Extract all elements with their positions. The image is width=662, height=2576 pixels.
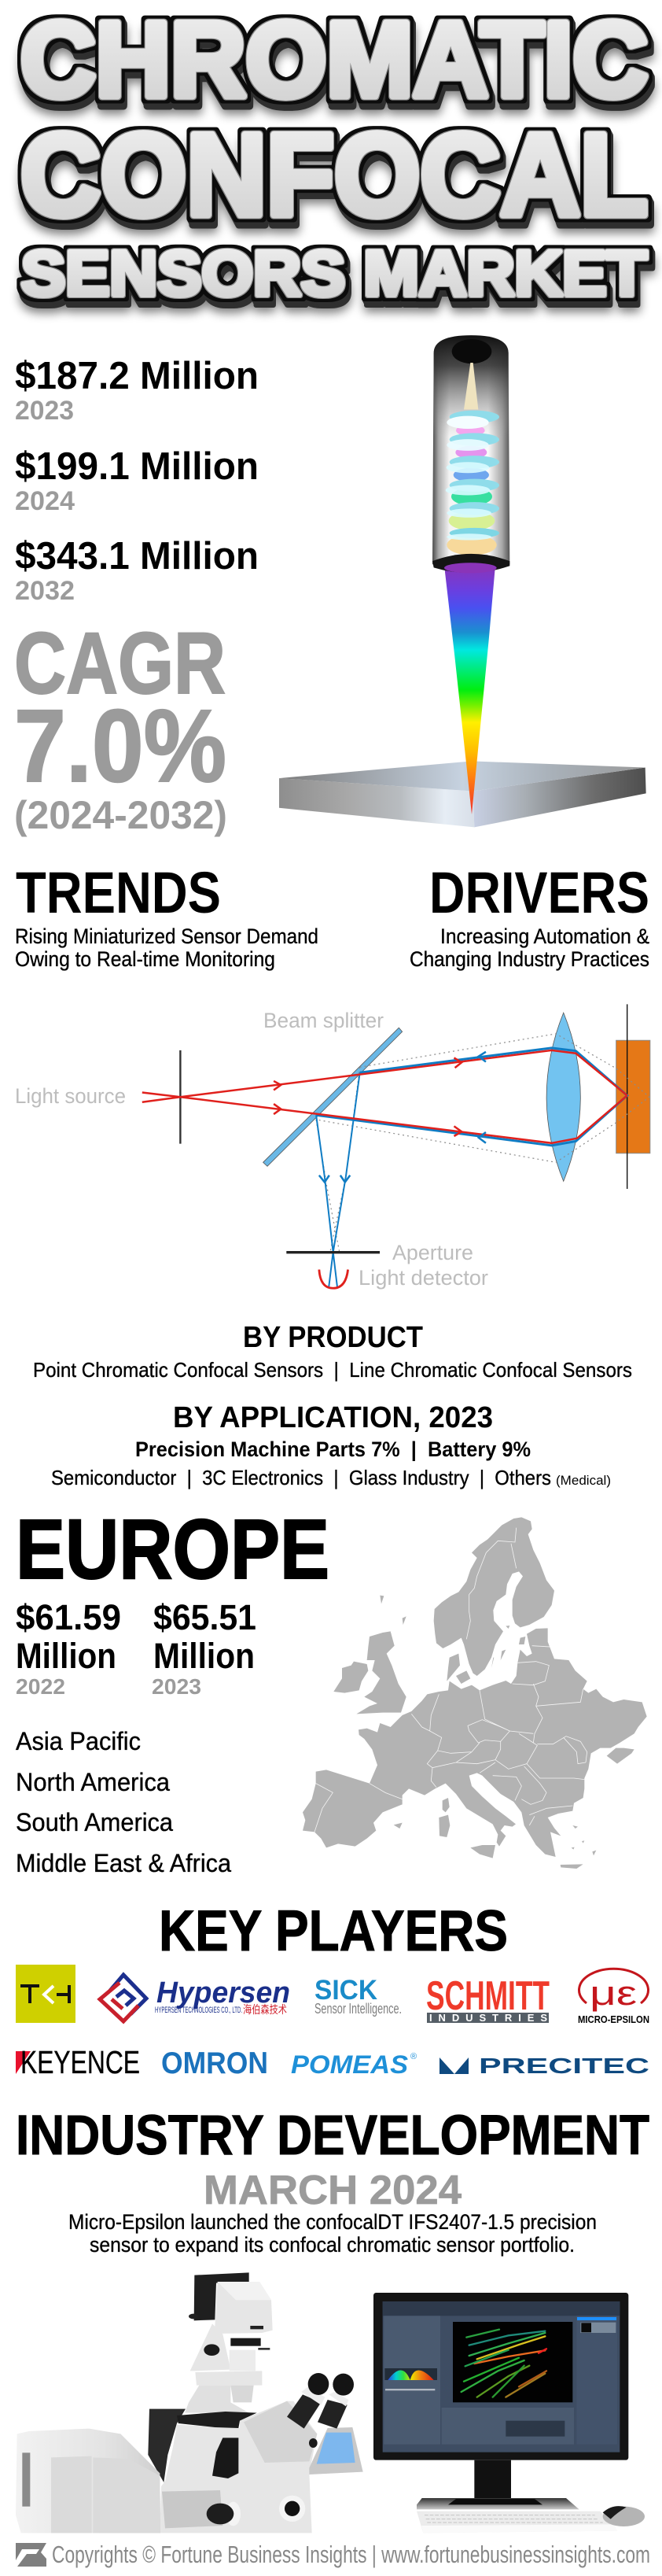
sensor tube [432,335,509,573]
monitor stand [474,2460,511,2500]
logo: Omron: OMRON [161,2046,268,2080]
value 2022: $61.59 [16,1597,121,1637]
label: beam splitter: Beam splitter [263,1009,384,1032]
other regions: North America [16,1768,170,1796]
year 2022: 2022 [16,1674,65,1699]
description line 1: Micro-Epsilon launched the confocalDT IFS2407-1.5 precision [68,2210,597,2234]
product list: Point Chromatic Confocal Sensors | Line Chromatic Confocal Sensors [33,1358,632,1382]
label: light source: Light source [15,1084,126,1108]
logo: SICK: Sensor Intelligence. [314,2001,402,2017]
logo: Precitec [439,2054,649,2078]
optical paths [142,1004,650,1288]
year 2023: 2023 [152,1674,201,1699]
light beam [444,565,495,814]
logo: Precitec: PRECITEC [479,2054,649,2078]
other regions [16,1727,231,1877]
map of Europe [303,1517,647,1869]
panel: Europe region [16,1501,329,1877]
year 2024: 2024 [15,486,75,516]
unit 2023: Million [153,1636,255,1676]
other regions: South America [16,1808,173,1836]
value 2023: $65.51 [153,1597,256,1637]
by application heading: BY APPLICATION, 2023 [173,1401,493,1434]
microscope image [462,2330,546,2397]
CAGR period: (2024-2032) [14,793,227,837]
logo: SICK [314,1975,402,2017]
other regions: Middle East & Africa [16,1849,231,1877]
year 2032: 2032 [15,576,75,606]
monitor [373,2293,628,2460]
CAGR value: 7.0% [14,688,226,803]
footer [16,2541,650,2568]
logo: Micro-Epsilon [578,1969,649,2025]
title: CONFOCAL [20,110,648,240]
keyboard [417,2511,617,2533]
logo: TH [16,1965,75,2023]
logo: Keyence: KEYENCE [20,2044,140,2080]
logo: Hypersen [100,1975,290,2021]
logo: Schmitt Industries: SCHMITT [426,1973,550,2019]
spectrum chart [384,2368,437,2380]
logo: Schmitt Industries [426,1973,550,2024]
logo: Pomeas: ® [410,2052,417,2061]
logo: Micro-Epsilon: με [590,1974,637,2013]
panel: drivers [410,860,649,971]
application note: (Medical) [556,1473,611,1488]
unit 2022: Million [16,1636,116,1676]
logo: Pomeas: POMEAS [291,2050,409,2079]
logo: SICK: SICK [314,1975,377,2006]
lenses [446,411,499,540]
trends heading: TRENDS [16,860,221,925]
trends line 2: Owing to Real-time Monitoring [15,947,275,971]
panel: industry development [16,2105,649,2257]
region heading: EUROPE [16,1501,329,1596]
value 2032: $343.1 Million [15,535,259,578]
logo: Fortune Business Insights [16,2543,46,2567]
title: SENSORS MARKET [21,238,647,309]
logo: Schmitt Industries: INDUSTRIES [429,2012,547,2024]
logo: Hypersen: 海伯森技术 [243,2003,287,2016]
title: CHROMATIC [20,0,648,119]
label: aperture: Aperture [392,1241,473,1264]
CAGR label: CAGR [14,615,226,712]
application shares: Precision Machine Parts 7% | Battery 9% [135,1437,531,1461]
value 2023: $187.2 Million [15,355,259,397]
year 2023: 2023 [15,396,74,426]
heading: key players: KEY PLAYERS [159,1899,508,1963]
date: MARCH 2024 [204,2168,462,2213]
description line 2: sensor to expand its confocal chromatic sensor portfolio. [90,2233,575,2257]
market values [15,355,259,606]
logo: Hypersen: HYPERSEN TECHNOLOGIES CO., LTD. [155,2006,242,2015]
other regions: Asia Pacific [16,1727,141,1755]
logo: Micro-Epsilon: MICRO-EPSILON [578,2013,649,2025]
mouse [603,2506,645,2526]
illustration: monitor and keyboard [373,2293,645,2533]
application list: Semiconductor | 3C Electronics | Glass Industry | Others [51,1466,551,1489]
optical diagram [15,1004,650,1290]
logo: Hypersen: Hypersen [156,1976,290,2010]
panel: trends [15,860,318,971]
illustration: chromatic confocal sensor [279,335,646,827]
label: light detector: Light detector [359,1266,488,1290]
sensor plate [279,761,646,827]
value 2024: $199.1 Million [15,445,259,488]
trends line 1: Rising Miniaturized Sensor Demand [15,924,318,948]
CAGR block [14,615,227,837]
title [20,0,648,309]
illustration: confocal microscope [16,2272,363,2533]
by product heading: BY PRODUCT [243,1321,423,1354]
panel: segmentation [33,1321,632,1489]
